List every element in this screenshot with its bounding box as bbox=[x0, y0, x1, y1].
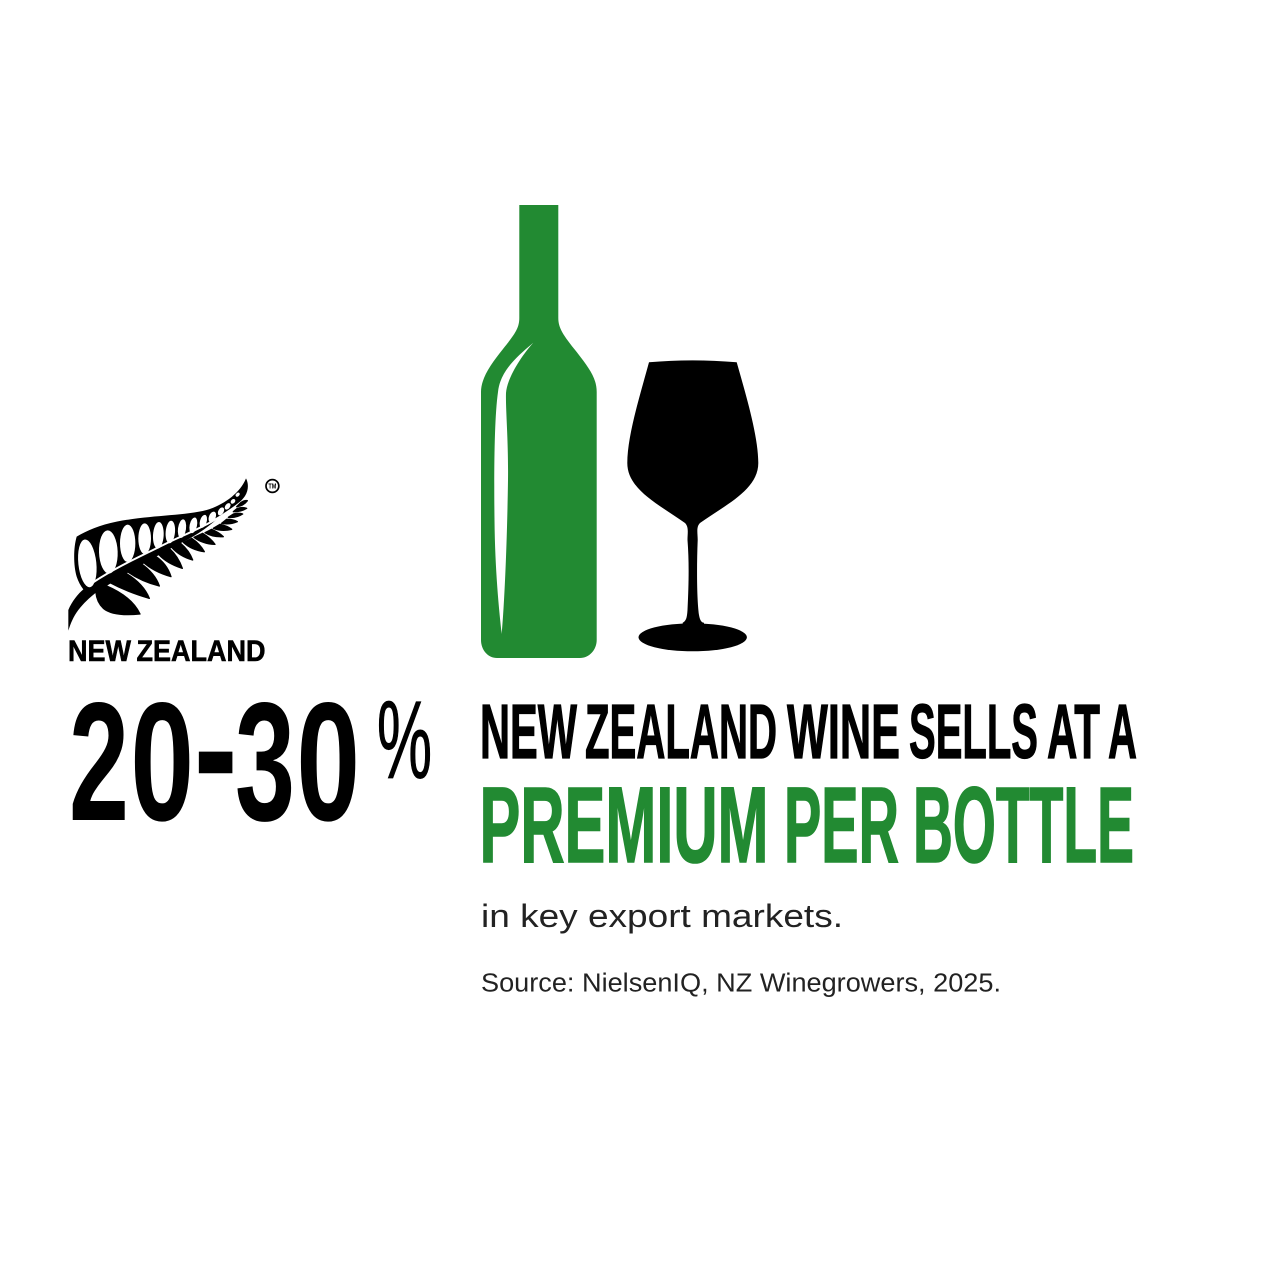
headline line: premium per bottle: PREMIUM bbox=[480, 765, 768, 885]
subtext: in key export markets. bbox=[481, 898, 843, 934]
big number: 20-30: 3 bbox=[235, 667, 295, 856]
percent sign: % bbox=[377, 679, 432, 802]
big number: 20-30: 0 bbox=[296, 667, 360, 856]
headline line: New Zealand wine sells at a: WINE bbox=[787, 689, 900, 775]
big number: 20-30: 0 bbox=[130, 667, 194, 856]
headline line: New Zealand wine sells at a: A bbox=[1108, 689, 1137, 775]
headline line: New Zealand wine sells at a: SELLS bbox=[909, 689, 1038, 775]
headline line: New Zealand wine sells at a: AT bbox=[1047, 689, 1100, 775]
big number: 20-30: - bbox=[194, 645, 238, 849]
trademark symbol: TM bbox=[268, 482, 276, 491]
headline line: New Zealand wine sells at a: NEW bbox=[480, 689, 577, 775]
icon: wine glass bbox=[627, 360, 758, 651]
big number: 20-30: 2 bbox=[69, 667, 129, 856]
headline line: premium per bottle: PER bbox=[784, 765, 899, 885]
headline line: New Zealand wine sells at a bbox=[480, 689, 1137, 775]
big number: 20-30 bbox=[69, 645, 360, 856]
logo wordmark: NEW ZEALAND: ZEALAND bbox=[136, 635, 266, 668]
trademark symbol bbox=[266, 480, 279, 492]
headline line: New Zealand wine sells at a: ZEALAND bbox=[585, 689, 777, 775]
logo wordmark: NEW ZEALAND bbox=[68, 635, 266, 668]
icon: green wine bottle bbox=[481, 205, 597, 658]
logo wordmark: NEW ZEALAND: NEW bbox=[68, 635, 131, 668]
source note: Source: NielsenIQ, NZ Winegrowers, 2025. bbox=[481, 970, 1001, 998]
logo: silver fern bbox=[68, 478, 248, 631]
